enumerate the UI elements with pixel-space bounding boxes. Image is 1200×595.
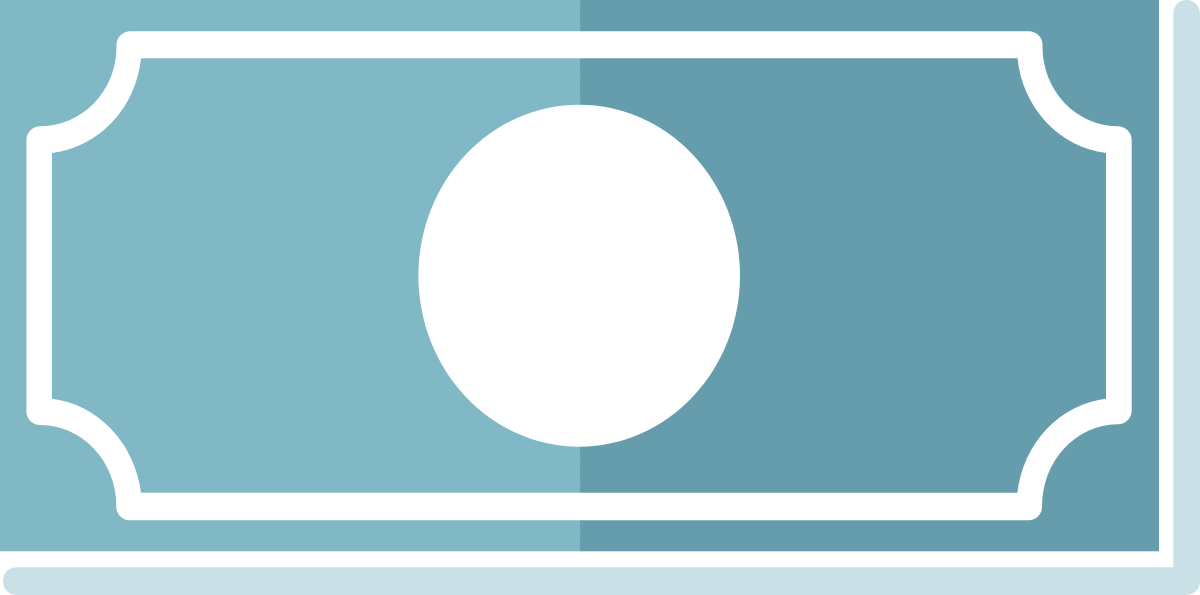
central circle (418, 105, 740, 447)
banknote right half (580, 0, 1159, 551)
banknote inner border frame (26, 31, 1132, 520)
banknote left half (0, 0, 580, 551)
